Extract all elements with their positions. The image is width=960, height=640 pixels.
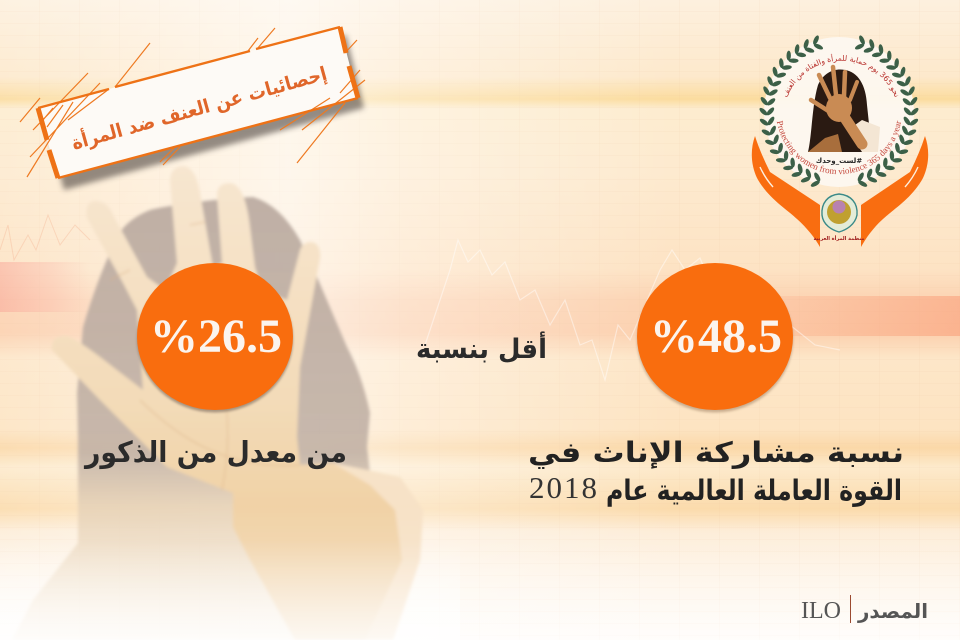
banner hatch lines — [20, 28, 365, 177]
logo orange hands — [752, 136, 928, 247]
stat circle: 26.5%: %26.5 — [150, 310, 282, 363]
logo — [752, 35, 928, 247]
logo english slogan: Protecting women from violence 365 days a year — [776, 120, 901, 174]
palm creases — [110, 222, 300, 490]
description: year: 2018 — [529, 470, 599, 505]
forearm sleeve — [333, 463, 423, 640]
banner title text: إحصائيات عن العنف ضد المرأة — [69, 61, 329, 155]
photo: woman raising her hand — [12, 166, 423, 640]
photo bottom fade — [0, 540, 460, 640]
description: female participation line 1: نسبة مشاركة الإناث في — [528, 436, 904, 469]
source name: ILO — [801, 598, 841, 624]
hair and body silhouette — [12, 197, 380, 640]
source separator — [850, 595, 851, 623]
logo emblem: Arab Women Organization — [813, 194, 865, 242]
description: global labour force line 2: القوة العاملة العالمية عام — [606, 474, 902, 507]
comparison label: أقل بنسبة — [416, 331, 547, 365]
banner borders — [38, 27, 358, 178]
logo woman with raised hand — [808, 67, 880, 152]
logo white disc — [764, 37, 914, 187]
logo hashtag: #لست_وحدك — [816, 157, 862, 165]
label: compared with male rate: من معدل من الذكور — [83, 435, 347, 469]
hand and forearm — [52, 166, 423, 640]
logo laurel wreath — [758, 34, 920, 190]
logo emblem: Arab Women Organization: منظمة المرأة العربية — [813, 235, 865, 242]
logo thumb outlines — [760, 167, 918, 187]
stat circle: 48.5%: %48.5 — [650, 310, 782, 363]
source label: المصدر — [857, 599, 928, 623]
stat circle: 48.5% — [637, 263, 793, 412]
stat circle: 26.5% — [137, 263, 293, 412]
callout banner: title — [20, 27, 365, 190]
logo arabic slogan: نحو 365 يوم حماية للمرأة والفتاة من العنف — [785, 54, 898, 97]
